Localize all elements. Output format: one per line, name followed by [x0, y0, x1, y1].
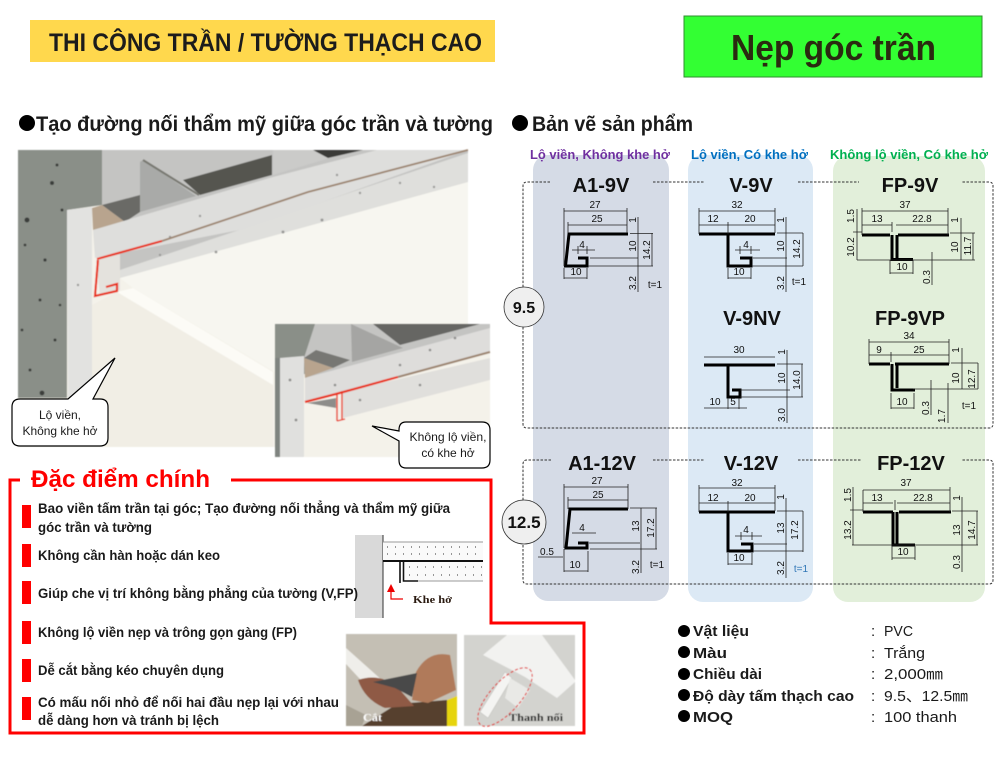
drawing: FP-9VP: 10 [951, 372, 962, 384]
spec: material: Vật liệu [693, 623, 749, 640]
drawing: FP-12V [843, 453, 978, 572]
spec: minimum order quantity: MOQ [693, 709, 733, 726]
callout: exposed edge, no gap: Không khe hở [22, 424, 98, 438]
group outline and badge: 12.5 mm [502, 460, 993, 584]
drawing: FP-12V: 10 [897, 547, 909, 558]
spec: material [678, 623, 913, 640]
drawing: A1-12V [538, 453, 665, 574]
feature 4 [22, 621, 297, 644]
drawing: FP-9VP: 1 [951, 347, 962, 353]
drawing: A1-12V: 0.5 [540, 547, 554, 558]
drawing: FP-12V: 14.7 [967, 520, 978, 540]
drawing: A1-12V: A1-12V [568, 453, 637, 475]
spec: material: PVC [884, 623, 913, 640]
drawing: V-9NV: V-9NV [723, 308, 782, 330]
diagram: gap cross-section [355, 535, 483, 618]
drawing: A1-9V: 14.2 [642, 240, 653, 260]
photo: joint connector [464, 635, 575, 735]
panel: column A1 background [533, 155, 669, 601]
drawing: V-9V: 10 [776, 240, 787, 252]
drawing: V-9NV [704, 308, 803, 423]
column label: exposed, gap: Lộ viền, Có khe hở [691, 147, 809, 162]
drawing: A1-12V: 4 [579, 523, 585, 534]
drawing: FP-9V: 10 [896, 262, 908, 273]
photo: cutting with scissors: Cắt [363, 712, 382, 724]
feature 5: Dễ cắt bằng kéo chuyên dụng [38, 663, 224, 678]
drawing: FP-9VP: 9 [876, 345, 882, 356]
spec: material: : [871, 623, 875, 640]
drawing: FP-9VP: 25 [913, 345, 925, 356]
drawing: V-9NV: 10 [777, 372, 788, 384]
drawing: FP-9VP: 1.7 [937, 409, 948, 423]
drawing: V-9V: 14.2 [792, 239, 803, 259]
drawing: V-9V: V-9V [729, 175, 773, 197]
feature 2: Không cần hàn hoặc dán keo [38, 548, 220, 563]
callout: exposed edge, no gap: Lộ viền, [39, 408, 81, 422]
spec: minimum order quantity: 100 thanh [884, 709, 957, 726]
photo: cutting with scissors [346, 634, 457, 726]
drawing: A1-9V: A1-9V [573, 175, 630, 197]
drawing: A1-12V: 17.2 [646, 518, 657, 538]
heading: aesthetic joint: Tạo đường nối thẩm mỹ giữa góc trần và tường [36, 113, 493, 136]
drawing: FP-9V: 0.3 [922, 270, 933, 284]
drawing: V-12V: 20 [744, 493, 756, 504]
drawing: V-9V: 1 [776, 217, 787, 223]
drawing: FP-9V [846, 175, 975, 285]
spec: minimum order quantity [678, 709, 957, 726]
drawing: FP-9V: 10 [950, 241, 961, 253]
spec: length [678, 666, 943, 683]
feature 6 [22, 695, 339, 728]
drawing: FP-9VP: t=1 [962, 401, 977, 412]
drawing: FP-12V: 13 [952, 524, 963, 536]
column label: not exposed, gap: Không lộ viền, Có khe hở [830, 147, 989, 162]
spec: board thickness: : [871, 688, 875, 705]
drawing: V-9V: 4 [743, 240, 749, 251]
feature 1: góc trần và tường [38, 520, 152, 535]
drawing: A1-12V: 27 [591, 476, 603, 487]
panel: main features [10, 466, 584, 733]
drawing: FP-9V: 11.7 [963, 236, 974, 255]
specification list [678, 623, 968, 726]
drawing: A1-9V: 3.2 [628, 276, 639, 290]
drawing: A1-12V: 25 [592, 490, 604, 501]
drawing: V-12V: 13 [776, 522, 787, 534]
drawing: A1-9V: 27 [589, 200, 601, 211]
callout: exposed edge, no gap [12, 358, 115, 446]
panel: column V background [688, 155, 813, 602]
drawing: FP-12V: 0.3 [952, 555, 963, 569]
spec: length: 2,000㎜ [884, 666, 943, 683]
feature 6: dễ dàng hơn và tránh bị lệch [38, 713, 219, 728]
inset photo: no exposed edge ceiling corner [275, 324, 490, 457]
drawing: A1-12V: 10 [569, 560, 581, 571]
drawing: FP-12V: 1.5 [843, 488, 854, 502]
drawing: FP-9V: FP-9V [882, 175, 939, 197]
drawing: FP-9V: 22.8 [912, 214, 932, 225]
drawing: A1-9V: 25 [591, 214, 603, 225]
group outline and badge: 9.5 mm [504, 182, 993, 428]
group outline and badge: 9.5 mm: 9.5 [513, 300, 535, 317]
drawing: FP-9VP [869, 308, 978, 423]
drawing: A1-12V: 13 [631, 520, 642, 532]
drawing: A1-12V: 3.2 [631, 560, 642, 574]
drawing: V-12V: V-12V [724, 453, 779, 475]
feature 2 [22, 544, 220, 567]
drawing: V-12V: 4 [743, 525, 749, 536]
spec: colour: Trắng [884, 645, 925, 662]
drawing: FP-9V: 1.5 [846, 209, 857, 223]
drawing: V-9NV: 3.0 [777, 408, 788, 422]
callout: no exposed edge, with gap [372, 422, 490, 468]
drawing: V-12V: t=1 [794, 564, 809, 575]
drawing: V-12V: 12 [707, 493, 719, 504]
drawing: A1-9V: 10 [570, 267, 582, 278]
feature 6: Có mấu nối nhỏ để nối hai đầu nẹp lại với nhau [38, 695, 339, 710]
title: product name [684, 16, 982, 77]
spec: length: Chiều dài [693, 666, 762, 683]
drawing: V-9V [699, 175, 807, 292]
spec: board thickness [678, 688, 968, 705]
drawing: FP-12V: 22.8 [913, 493, 933, 504]
drawing: A1-12V: t=1 [650, 560, 665, 571]
feature 3 [22, 581, 358, 604]
spec: length: : [871, 666, 875, 683]
drawing: V-12V: 10 [733, 553, 745, 564]
drawing: FP-9VP: 0.3 [921, 401, 932, 415]
drawing: FP-12V: 1 [952, 495, 963, 501]
spec: minimum order quantity: : [871, 709, 875, 726]
drawing: FP-9V: 13 [871, 214, 883, 225]
drawing: A1-9V: t=1 [648, 280, 663, 291]
drawing: V-9V: 20 [744, 214, 756, 225]
feature 4: Không lộ viền nẹp và trông gọn gàng (FP) [38, 625, 297, 640]
drawing: A1-9V: 1 [628, 217, 639, 223]
drawing: A1-9V: 10 [628, 240, 639, 252]
panel: column FP background [833, 156, 985, 602]
header banner: category [30, 20, 495, 62]
drawing: FP-9V: 1 [950, 217, 961, 223]
drawing: FP-12V: FP-12V [877, 453, 946, 475]
drawing: V-9V: t=1 [792, 277, 807, 288]
drawing: FP-9V: 10.2 [846, 237, 857, 257]
drawing: FP-9VP: 12.7 [967, 369, 978, 389]
drawing: V-12V: 32 [731, 478, 743, 489]
title: product name: Nẹp góc trần [731, 27, 936, 68]
drawing: V-12V: 3.2 [776, 561, 787, 575]
heading: main features: Đặc điểm chính [31, 466, 210, 493]
diagram: gap cross-section: Khe hở [413, 594, 453, 606]
spec: colour [678, 645, 925, 662]
drawing: V-9NV: 5 [730, 397, 736, 408]
header banner: category: THI CÔNG TRẦN / TƯỜNG THẠCH CAO [49, 27, 482, 57]
drawing: V-9V: 3.2 [776, 276, 787, 290]
drawing: V-9NV: 14.0 [792, 370, 803, 390]
spec: colour: Màu [693, 645, 727, 662]
photo: joint connector: Thanh nối [509, 712, 563, 724]
column label: exposed, no gap: Lộ viền, Không khe hở [530, 147, 671, 162]
drawing: V-9NV: 10 [709, 397, 721, 408]
group outline and badge: 12.5 mm: 12.5 [507, 513, 541, 532]
drawing: V-9V: 12 [707, 214, 719, 225]
spec: board thickness: Độ dày tấm thạch cao [693, 688, 854, 705]
drawing: V-9V: 32 [731, 200, 743, 211]
callout: no exposed edge, with gap: có khe hở [421, 446, 475, 460]
spec: colour: : [871, 645, 875, 662]
drawing: V-12V [699, 453, 809, 578]
drawing: A1-9V: 4 [579, 240, 585, 251]
feature 5 [22, 659, 224, 682]
drawing: A1-9V [564, 175, 663, 292]
drawing: FP-9V: 37 [899, 200, 911, 211]
spec: board thickness: 9.5、12.5㎜ [884, 688, 968, 705]
drawing: FP-9VP: 10 [896, 397, 908, 408]
feature 1: Bao viền tấm trần tại góc; Tạo đường nối thẳng và thẩm mỹ giữa [38, 501, 450, 516]
drawing: FP-9VP: FP-9VP [875, 308, 945, 330]
drawing: FP-12V: 13.2 [843, 520, 854, 540]
drawing: FP-12V: 13 [871, 493, 883, 504]
drawing: V-12V: 1 [776, 494, 787, 500]
callout: no exposed edge, with gap: Không lộ viền, [410, 430, 486, 444]
drawing: V-9V: 10 [733, 267, 745, 278]
feature 1 [22, 501, 450, 535]
drawing: V-9NV: 30 [733, 345, 745, 356]
main photo: exposed edge ceiling corner [18, 150, 468, 447]
feature 3: Giúp che vị trí không bằng phẳng của tường (V,FP) [38, 586, 358, 601]
drawing: V-12V: 17.2 [790, 520, 801, 540]
drawing: V-9NV: 1 [777, 349, 788, 355]
heading: product drawings: Bản vẽ sản phẩm [532, 113, 693, 136]
drawing: FP-9VP: 34 [903, 331, 915, 342]
drawing: FP-12V: 37 [900, 478, 912, 489]
